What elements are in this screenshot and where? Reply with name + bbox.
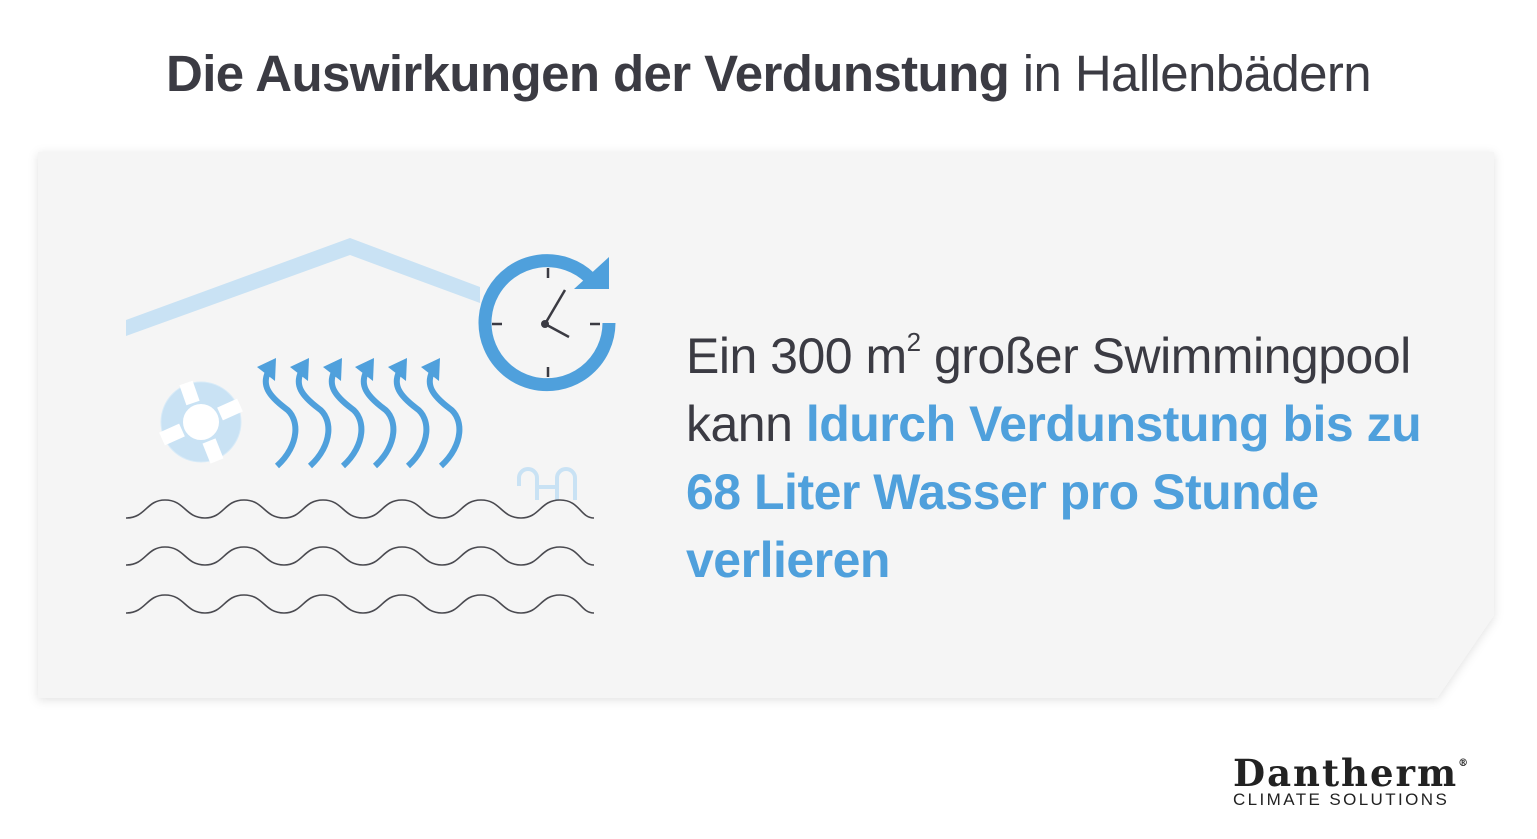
text block: statement: kann ldurch Verdunstung bis zu	[686, 396, 1421, 452]
icon: life ring	[161, 382, 241, 462]
waves	[126, 500, 594, 613]
icon: evaporation arrows	[257, 358, 459, 466]
logo: Dantherm: Dantherm®	[1233, 751, 1470, 795]
icon: clock with refresh arrow	[485, 257, 609, 385]
logo: Dantherm: CLIMATE SOLUTIONS	[1233, 790, 1449, 809]
text block: statement	[686, 327, 1421, 588]
title: Die Auswirkungen der Verdunstung in Hallenbädern	[166, 45, 1371, 102]
panel: card	[35, 151, 1497, 703]
text block: statement: 68 Liter Wasser pro Stunde	[686, 464, 1319, 520]
roof	[126, 238, 480, 336]
text block: statement: Ein 300 m2 großer Swimmingpool	[686, 327, 1411, 384]
icon: pool ladder	[519, 469, 575, 500]
text block: statement: verlieren	[686, 532, 890, 588]
